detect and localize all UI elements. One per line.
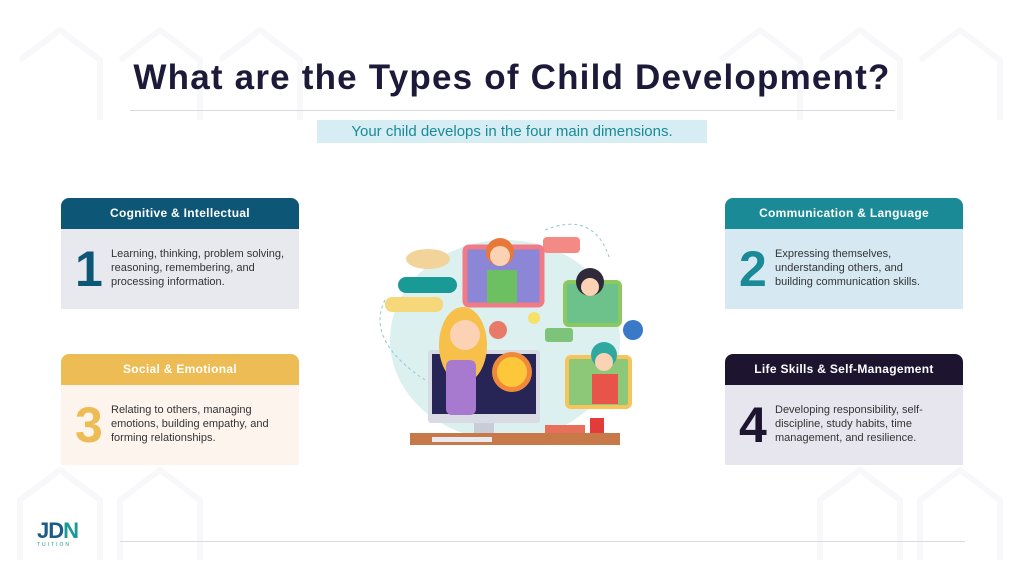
subtitle: Your child develops in the four main dimensions.	[351, 123, 673, 140]
monitor	[428, 350, 540, 423]
card 3: Social	[61, 354, 299, 465]
card 1: Cognitive	[61, 198, 299, 309]
frame bottom	[567, 357, 630, 407]
card 2: Communication	[725, 198, 963, 309]
title: What are the Types of Child Development?	[133, 58, 891, 97]
card 4: Life skills: 4	[739, 397, 767, 453]
card 4: Life skills: Life Skills & Self-Management	[754, 362, 934, 376]
logo: JDN	[37, 518, 78, 543]
frame top	[465, 247, 542, 305]
desk	[410, 433, 620, 445]
logo: TUITION	[37, 542, 71, 548]
planets	[489, 321, 507, 339]
palette	[406, 249, 450, 269]
girl	[439, 307, 487, 383]
card 2: Communication: 2	[739, 241, 767, 297]
card 4: Life skills: Developing responsibility, self-discipline, study habits, time management, and resilience.	[775, 404, 923, 444]
card 2: Communication: Expressing themselves, understanding others, and building communication skills.	[775, 248, 920, 288]
card 1: Cognitive: Learning, thinking, problem solving, reasoning, remembering, and processing information.	[111, 248, 284, 288]
subtitle	[317, 120, 707, 143]
card 1: Cognitive: 1	[75, 241, 103, 297]
card 3: Social: Social & Emotional	[123, 362, 237, 376]
card 3: Social: 3	[75, 397, 103, 453]
card 2: Communication: Communication & Language	[759, 206, 929, 220]
bubbles	[398, 277, 457, 293]
frame right	[565, 282, 620, 325]
card 3: Social: Relating to others, managing emotions, building empathy, and forming relationships.	[111, 404, 269, 444]
card 4: Life skills	[725, 354, 963, 465]
card 1: Cognitive: Cognitive & Intellectual	[110, 206, 250, 220]
